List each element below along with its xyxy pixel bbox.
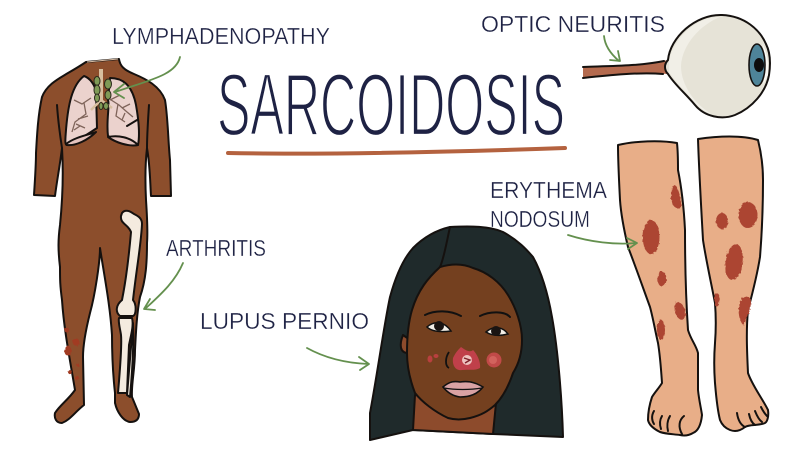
optic nerve (583, 60, 668, 78)
nose lesion (446, 347, 480, 370)
figure: body with lungs and bones (34, 59, 171, 423)
neck (413, 395, 496, 434)
hair (370, 227, 563, 440)
lips (443, 382, 483, 397)
eyeball shading (669, 17, 720, 114)
left leg (618, 141, 702, 436)
left leg patches (642, 185, 687, 340)
title underline (228, 148, 565, 154)
label: optic neuritis: OPTIC NEURITIS (481, 11, 665, 37)
bronchi (72, 95, 133, 132)
pupil (754, 58, 764, 72)
eyes (427, 321, 508, 336)
label: arthritis: ARTHRITIS (166, 235, 266, 261)
right leg (698, 136, 768, 431)
face (407, 264, 522, 420)
trachea (99, 69, 103, 100)
eyeball (665, 15, 770, 117)
figure: legs with erythema nodosum (618, 136, 768, 436)
right toes (737, 407, 767, 427)
label: erythema nodosum (490, 177, 608, 232)
arrow: optic neuritis (604, 36, 620, 61)
right leg patches (714, 202, 758, 325)
neck highlight (87, 59, 118, 62)
cheek lesions (428, 352, 502, 368)
lymph nodes (94, 76, 112, 110)
left toes (652, 411, 684, 434)
figure: face with lupus pernio (370, 227, 563, 440)
arrow: arthritis (144, 263, 183, 310)
arm lines (57, 105, 149, 148)
label: lupus pernio: LUPUS PERNIO (200, 308, 369, 334)
hair parting (440, 227, 450, 267)
eyebrows (425, 311, 510, 317)
lungs (65, 69, 139, 145)
label: erythema nodosum: ERYTHEMA (490, 177, 608, 203)
cornea (762, 43, 768, 85)
ear (401, 335, 410, 353)
body silhouette (34, 59, 171, 423)
arrow: lupus pernio (307, 348, 369, 370)
arrow: erythema nodosum (568, 235, 637, 249)
label: erythema nodosum: NODOSUM (490, 206, 590, 232)
leg bones (117, 211, 142, 397)
iris (749, 44, 765, 86)
arrow: lymphadenopathy (114, 57, 180, 98)
label: lymphadenopathy: LYMPHADENOPATHY (112, 23, 330, 49)
figure: eye and optic nerve (583, 15, 770, 117)
leg lesions (64, 328, 80, 380)
